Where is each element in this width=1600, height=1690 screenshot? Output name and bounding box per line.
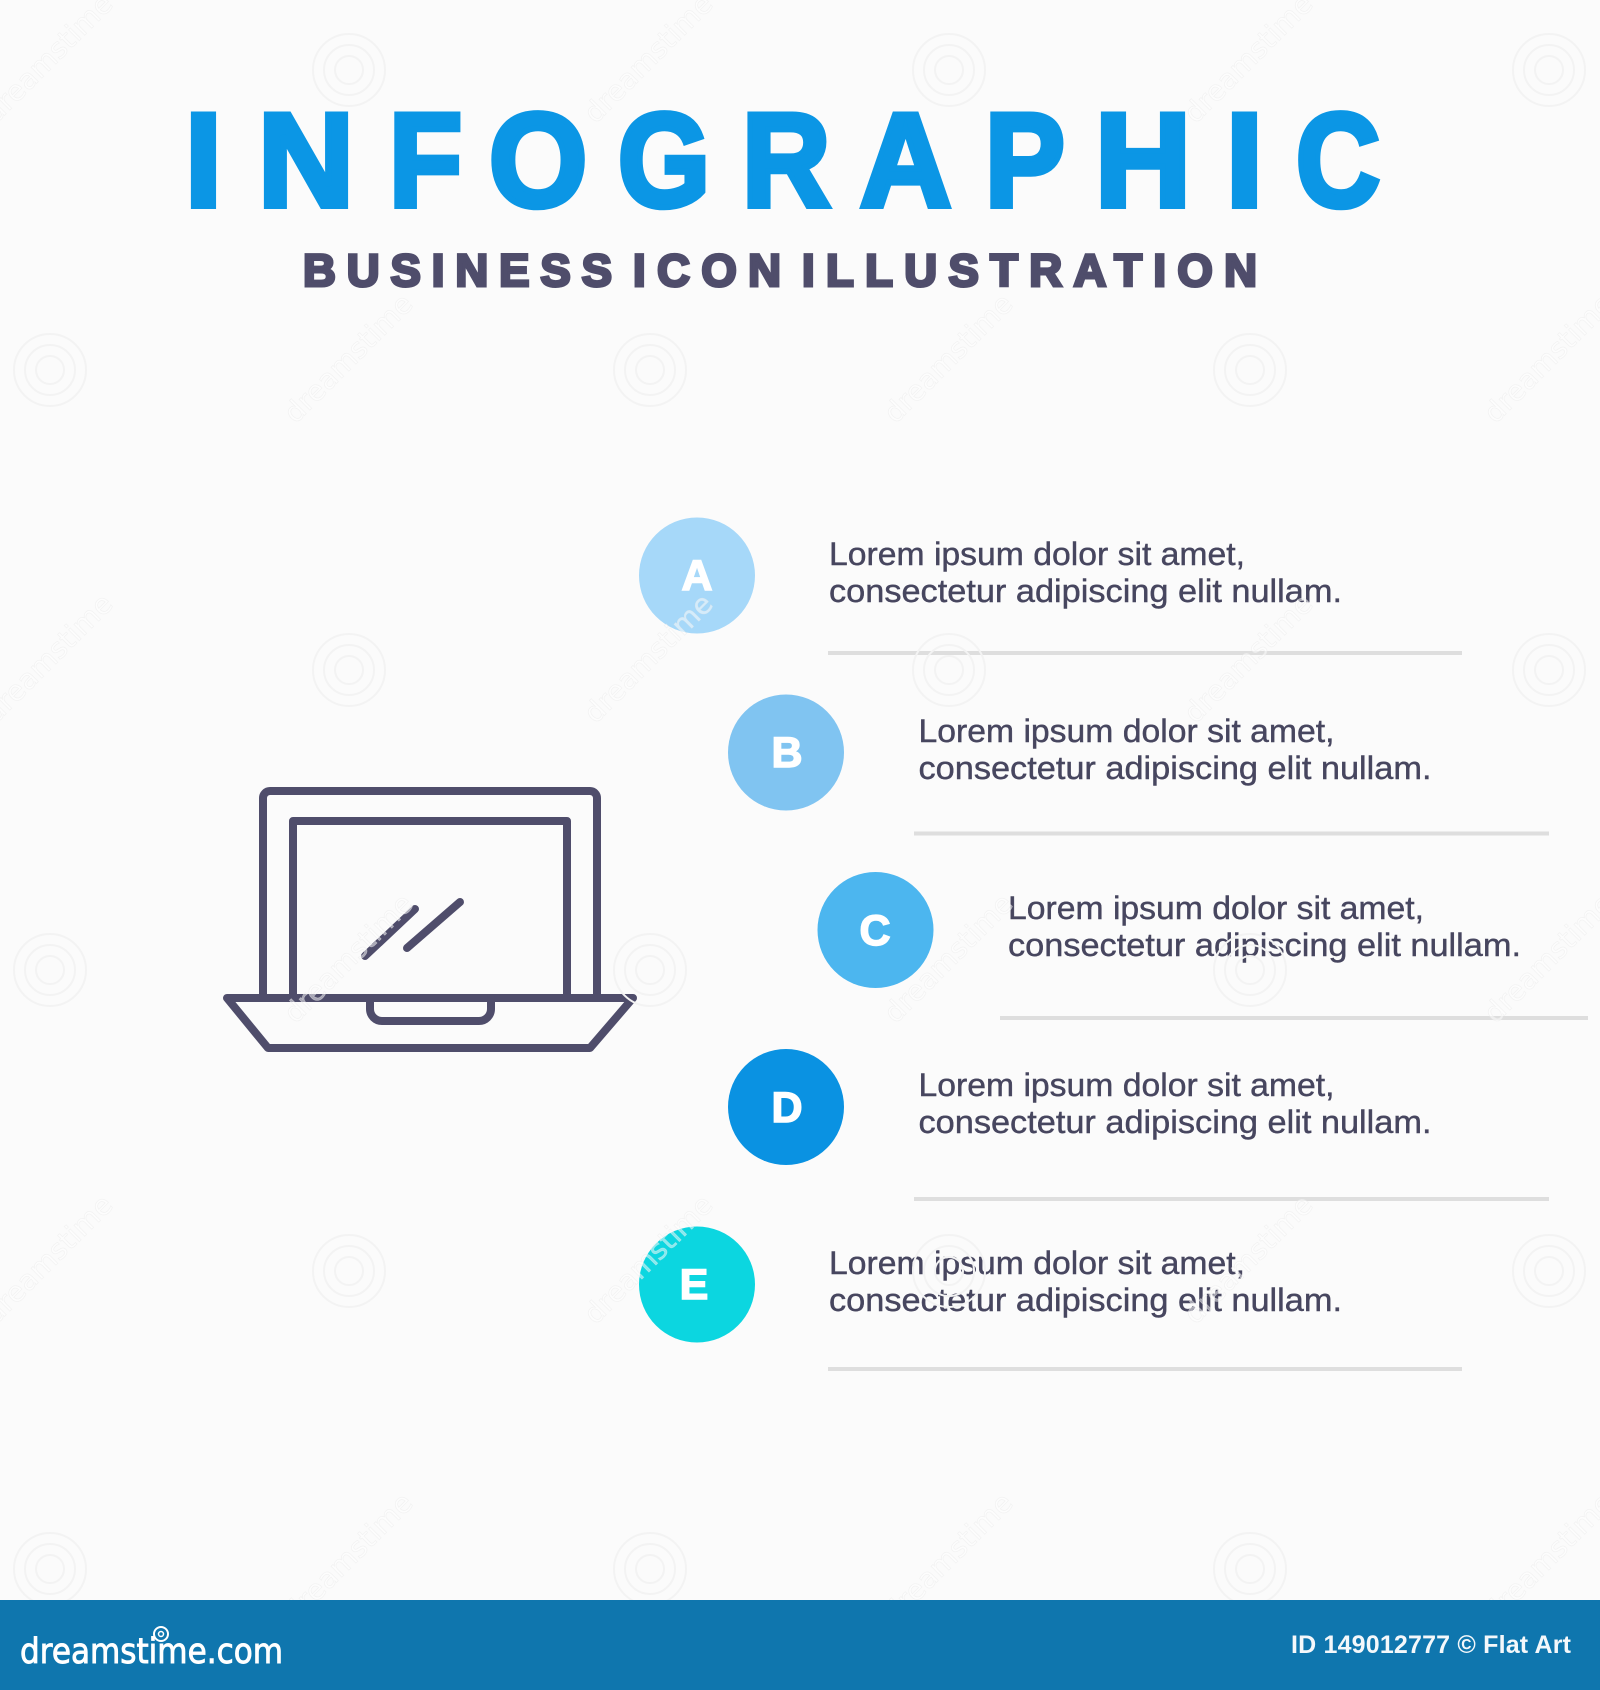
title: G: [618, 86, 710, 235]
watermark pattern: dreamstime: [277, 887, 419, 1029]
badge C: C: [859, 907, 891, 955]
text B: [918, 713, 1432, 786]
text C: [1008, 890, 1521, 963]
text B: consectetur adipiscing elit nullam.: [918, 750, 1432, 786]
text C: consectetur adipiscing elit nullam.: [1008, 927, 1521, 963]
title: P: [985, 85, 1065, 234]
text B: Lorem ipsum dolor sit amet,: [918, 713, 1334, 749]
badge D: D: [771, 1084, 803, 1132]
watermark pattern: dreamstime: [877, 887, 1019, 1029]
title: N: [258, 87, 354, 235]
text E: consectetur adipiscing elit nullam.: [829, 1282, 1342, 1318]
badge E: E: [680, 1261, 708, 1309]
text C: Lorem ipsum dolor sit amet,: [1008, 890, 1424, 926]
text A: [829, 536, 1342, 609]
title: I: [185, 87, 222, 235]
text A: Lorem ipsum dolor sit amet,: [829, 536, 1245, 572]
watermark pattern: dreamstime: [1177, 587, 1319, 729]
title: C: [1296, 87, 1380, 235]
text D: [918, 1067, 1432, 1140]
item A: [639, 518, 1342, 634]
item D: [728, 1049, 1432, 1165]
badge A: [639, 518, 755, 634]
footer credit: ID 149012777 © Flat Art: [1291, 1631, 1572, 1659]
badge B: B: [771, 729, 803, 777]
watermark pattern: dreamstime: [877, 1486, 1019, 1628]
badge C: [818, 872, 934, 988]
title: [185, 85, 1380, 235]
footer logo: dreamstime.com: [20, 1632, 283, 1672]
watermark pattern: dreamstime: [1177, 1188, 1319, 1330]
subtitle: ILLUSTRATION: [802, 245, 1257, 296]
watermark pattern: dreamstime: [877, 287, 1019, 429]
watermark pattern: dreamstime: [277, 1486, 419, 1628]
item B: [728, 694, 1432, 810]
badge E: [639, 1226, 755, 1342]
text D: consectetur adipiscing elit nullam.: [918, 1104, 1432, 1140]
subtitle: ICON: [633, 245, 781, 296]
watermark pattern: dreamstime: [277, 287, 419, 429]
subtitle: [303, 245, 1257, 296]
title: O: [489, 87, 587, 235]
title: A: [860, 87, 951, 235]
title: R: [742, 86, 830, 235]
watermark pattern: dreamstime: [577, 1188, 719, 1330]
title: H: [1095, 87, 1191, 235]
badge B: [728, 694, 844, 810]
item E: [639, 1226, 1342, 1342]
title: I: [1226, 87, 1263, 235]
subtitle: BUSINESS: [303, 245, 612, 296]
watermark pattern: dreamstime: [577, 587, 719, 729]
badge D: [728, 1049, 844, 1165]
item C: [818, 872, 1521, 988]
text E: [829, 1245, 1342, 1318]
text D: Lorem ipsum dolor sit amet,: [918, 1067, 1334, 1103]
badge A: A: [681, 552, 713, 600]
text E: Lorem ipsum dolor sit amet,: [829, 1245, 1245, 1281]
title: F: [389, 85, 462, 234]
text A: consectetur adipiscing elit nullam.: [829, 573, 1342, 609]
footer bar: [0, 1600, 1600, 1690]
icon: laptop: [227, 791, 633, 1048]
